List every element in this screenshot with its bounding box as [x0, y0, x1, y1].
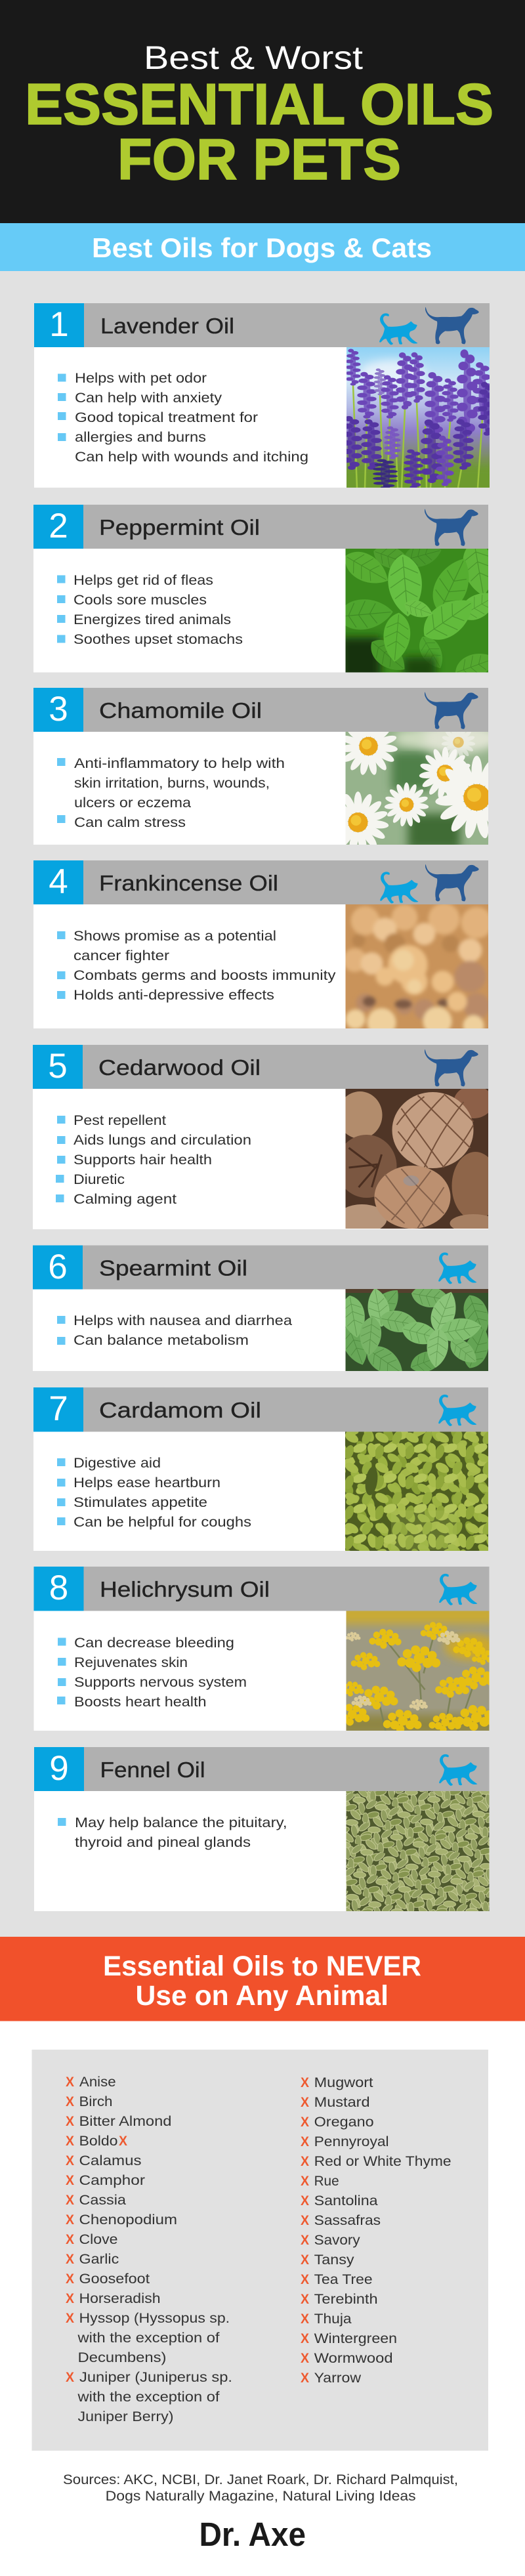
header bar — [33, 1387, 488, 1432]
left column list: X — [66, 2232, 74, 2247]
benefits list: Can calm stress — [74, 814, 186, 830]
benefits list — [57, 928, 336, 1003]
left column list: Birch — [79, 2094, 113, 2109]
benefits list — [57, 1635, 247, 1710]
right column list: Mugwort — [314, 2075, 373, 2090]
header bar: Frankincense Oil — [99, 871, 278, 895]
header bar: Cardamom Oil — [99, 1398, 261, 1422]
header bar — [33, 688, 488, 732]
right column list: Wintergreen — [314, 2331, 397, 2346]
left column list: X — [66, 2173, 74, 2188]
right column list: Wormwood — [314, 2350, 393, 2366]
benefits list: cancer fighter — [74, 948, 169, 963]
left column list: X — [66, 2370, 74, 2385]
right column list: X — [301, 2193, 309, 2208]
right column list: X — [301, 2174, 309, 2189]
photo: chamomile — [345, 732, 488, 845]
icon: cat — [439, 1754, 477, 1786]
left column list: Goosefoot — [79, 2271, 150, 2287]
benefits list: Soothes upset stomachs — [74, 631, 243, 647]
right column list: Pennyroyal — [314, 2134, 389, 2149]
photo: frankincense — [345, 904, 488, 1028]
right column list: X — [301, 2095, 309, 2110]
photo: lavender — [346, 347, 490, 488]
panel: fennel oil — [34, 1747, 490, 1911]
left column list: X — [66, 2291, 74, 2306]
benefits list: Can help with anxiety — [75, 390, 222, 406]
left column list: X — [66, 2271, 74, 2287]
icon: cat — [438, 1252, 476, 1284]
right column list: Terebinth — [314, 2291, 378, 2307]
right column list: X — [301, 2233, 309, 2248]
benefits list: Can help with wounds and itching — [75, 449, 308, 465]
header bar — [33, 1246, 488, 1289]
header bar: Helichrysum Oil — [100, 1577, 270, 1601]
main title: ESSENTIAL OILS — [25, 72, 494, 137]
icon: cat — [438, 1395, 476, 1426]
benefits list: Helps with pet odor — [75, 370, 207, 386]
benefits list: skin irritation, burns, wounds, — [74, 775, 270, 791]
right column list: X — [301, 2331, 309, 2346]
header bar: 7 — [49, 1389, 68, 1428]
subtitle: Best & Worst — [144, 39, 363, 76]
icon: dog — [425, 1049, 478, 1086]
left column list: Garlic — [79, 2251, 119, 2267]
benefits list: Calming agent — [74, 1191, 177, 1207]
header bar — [33, 505, 488, 549]
benefits list — [57, 1455, 251, 1530]
photo: helichrysum — [346, 1611, 490, 1731]
right column list: Tea Tree — [314, 2271, 373, 2287]
header bar: 5 — [48, 1047, 68, 1086]
panel: spearmint oil — [33, 1246, 495, 1383]
main title: FOR PETS — [117, 127, 401, 192]
photo: spearmint — [345, 1289, 488, 1371]
section heading: never use: Use on Any Animal — [135, 1980, 388, 2012]
left column list: X — [119, 2134, 127, 2149]
right column list: X — [301, 2154, 309, 2169]
benefits list: ulcers or eczema — [74, 795, 191, 811]
photo: cedar cones — [345, 1089, 488, 1229]
benefits list: Helps ease heartburn — [74, 1475, 220, 1490]
benefits list: Rejuvenates skin — [74, 1655, 188, 1670]
panel: lavender oil — [34, 303, 497, 498]
benefits list: Diuretic — [74, 1172, 125, 1187]
left column list: X — [66, 2193, 74, 2208]
panel: oils to avoid — [32, 2050, 488, 2451]
header bar: 8 — [49, 1569, 68, 1607]
left column list: X — [66, 2094, 74, 2109]
header bar — [33, 860, 488, 904]
header bar: 6 — [48, 1248, 68, 1286]
benefits list: Energizes tired animals — [74, 612, 231, 627]
right column list: X — [301, 2272, 309, 2287]
right column list: X — [301, 2292, 309, 2307]
left column list: Horseradish — [79, 2291, 160, 2306]
left column list: X — [66, 2153, 74, 2168]
benefits list: Supports hair health — [74, 1152, 212, 1168]
benefits list: Stimulates appetite — [74, 1494, 207, 1510]
header bar — [33, 1045, 488, 1089]
left column list: X — [66, 2311, 74, 2326]
benefits list — [57, 1313, 292, 1348]
icon: dog — [425, 692, 478, 729]
left column list: X — [66, 2114, 74, 2129]
right column list: Oregano — [314, 2114, 374, 2130]
right column list: Rue — [314, 2173, 339, 2189]
benefits list: Shows promise as a potential — [74, 928, 276, 944]
photo: peppermint — [345, 549, 488, 672]
header bar: 2 — [49, 507, 68, 545]
panel: cardamom oil — [33, 1387, 488, 1552]
right column list: Sassafras — [314, 2212, 381, 2228]
left column list: Bitter Almond — [79, 2113, 172, 2129]
header bar: Spearmint Oil — [99, 1256, 247, 1280]
benefits list: Pest repellent — [74, 1112, 166, 1128]
right column list: X — [301, 2134, 309, 2149]
left column list: Anise — [79, 2074, 116, 2090]
header bar — [34, 1747, 490, 1791]
benefits list — [58, 1815, 287, 1850]
right column list: X — [301, 2371, 309, 2386]
sources: Sources: AKC, NCBI, Dr. Janet Roark, Dr. Richard Palmquist, — [63, 2472, 458, 2487]
benefits list: Supports nervous system — [74, 1674, 247, 1690]
benefits list: Holds anti-depressive effects — [74, 987, 274, 1003]
header bar — [34, 1567, 490, 1611]
right column list: Santolina — [314, 2193, 378, 2208]
right column list: Mustard — [314, 2094, 370, 2110]
panel: chamomile oil — [33, 688, 518, 853]
benefits list: Can balance metabolism — [74, 1332, 249, 1348]
left column list: Decumbens) — [77, 2350, 167, 2365]
benefits list: thyroid and pineal glands — [75, 1834, 251, 1850]
icon: dog — [425, 307, 479, 344]
left column list: Chenopodium — [79, 2212, 177, 2228]
left column list: Cassia — [79, 2192, 126, 2208]
benefits list: Cools sore muscles — [74, 592, 207, 608]
header bar: Fennel Oil — [100, 1758, 205, 1782]
header bar: Chamomile Oil — [99, 698, 262, 723]
left column list — [66, 2074, 232, 2424]
left column list: with the exception of — [77, 2330, 220, 2346]
section heading: best oils — [0, 223, 525, 271]
icon: cat — [439, 1574, 477, 1605]
icon: cat — [379, 313, 417, 345]
left column list: Camphor — [79, 2172, 145, 2188]
right column list: X — [301, 2351, 309, 2366]
header bar: 4 — [49, 862, 68, 901]
benefits list: May help balance the pituitary, — [75, 1815, 287, 1830]
right column list: X — [301, 2115, 309, 2130]
benefits list — [57, 755, 285, 830]
right column list: X — [301, 2252, 309, 2268]
header bar: Cedarwood Oil — [98, 1055, 261, 1080]
header bar — [34, 303, 490, 347]
photo: fennel seeds — [346, 1791, 490, 1911]
benefits list — [57, 572, 243, 647]
left column list: Boldo — [79, 2133, 118, 2149]
panel: frankincense oil — [33, 860, 492, 1037]
section background — [0, 271, 525, 1938]
benefits list: Helps with nausea and diarrhea — [74, 1313, 292, 1328]
left column list: X — [66, 2075, 74, 2090]
right column list: Thuja — [314, 2311, 352, 2327]
benefits list: Anti-inflammatory to help with — [74, 755, 285, 771]
sources: Dogs Naturally Magazine, Natural Living Ideas — [106, 2488, 416, 2504]
icon: cat — [380, 872, 418, 903]
photo: cardamom — [345, 1432, 488, 1551]
benefits list: Boosts heart health — [74, 1694, 206, 1710]
benefits list: Helps get rid of fleas — [74, 572, 213, 588]
header panel — [0, 0, 525, 223]
right column list: X — [301, 2213, 309, 2228]
header bar: 9 — [49, 1749, 69, 1788]
left column list: Juniper (Juniperus sp. — [79, 2369, 232, 2385]
benefits list: Can be helpful for coughs — [74, 1514, 251, 1530]
benefits list: allergies and burns — [75, 429, 206, 445]
main title — [25, 72, 494, 192]
section heading: never use: Essential Oils to NEVER — [103, 1951, 421, 1982]
left column list: Juniper Berry) — [77, 2409, 173, 2424]
right column list: X — [301, 2075, 309, 2090]
icon: dog — [425, 864, 479, 901]
right column list: Savory — [314, 2232, 360, 2248]
header bar: Lavender Oil — [100, 314, 234, 338]
header bar: Peppermint Oil — [99, 515, 260, 539]
benefits list: Can decrease bleeding — [74, 1635, 234, 1651]
header bar: 1 — [49, 305, 69, 344]
left column list: Hyssop (Hyssopus sp. — [79, 2310, 230, 2326]
panel: cedarwood oil — [33, 1045, 499, 1233]
left column list: Calamus — [79, 2153, 142, 2168]
right column list — [301, 2075, 452, 2386]
left column list: X — [66, 2212, 74, 2228]
left column list: X — [66, 2252, 74, 2267]
right column list: X — [301, 2312, 309, 2327]
header bar: 3 — [49, 690, 68, 728]
left column list: with the exception of — [77, 2389, 220, 2405]
icon: dog — [425, 509, 478, 546]
left column list: Clove — [79, 2231, 118, 2247]
panel: helichrysum oil — [34, 1567, 497, 1734]
benefits list: Good topical treatment for — [75, 410, 258, 425]
benefits list — [56, 1112, 251, 1207]
logo: Dr. Axe: Dr. Axe — [200, 2516, 306, 2553]
panel: peppermint oil — [33, 505, 503, 684]
benefits list: Combats germs and boosts immunity — [74, 967, 336, 983]
benefits list: Aids lungs and circulation — [74, 1132, 251, 1148]
right column list: Red or White Thyme — [314, 2153, 452, 2169]
section heading: never use — [0, 1937, 525, 2021]
benefits list: Digestive aid — [74, 1455, 161, 1471]
section heading: best oils: Best Oils for Dogs & Cats — [92, 232, 432, 263]
left column list: X — [66, 2134, 74, 2149]
sources — [63, 2472, 458, 2504]
right column list: Tansy — [314, 2252, 354, 2268]
benefits list — [58, 370, 308, 465]
right column list: Yarrow — [314, 2370, 361, 2386]
